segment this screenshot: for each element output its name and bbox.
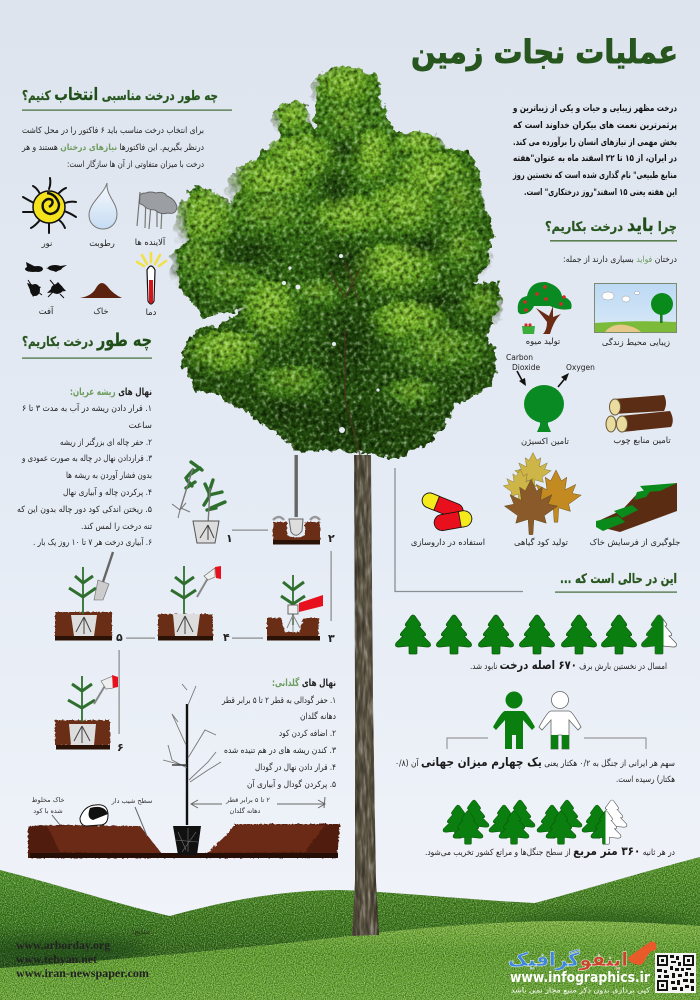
text block: potted saplings: ۲. اضافه کردن کود xyxy=(279,729,336,739)
heading: meanwhile xyxy=(555,572,677,593)
icon: medicine capsules xyxy=(420,491,473,532)
connector xyxy=(118,650,120,734)
intro text: six factors xyxy=(21,126,204,170)
text: benefits intro: درختان فواید بسیاری دارند از جمله: xyxy=(563,255,677,265)
sources: www.tebyan.net xyxy=(16,952,97,966)
icon: soil heap xyxy=(80,283,122,298)
text block: bare-root saplings: ۶. آبیاری درخت هر ۷ تا ۱۰ روز یک بار . xyxy=(33,536,152,548)
sources: منابع: xyxy=(132,927,150,936)
text block: bare-root saplings: ۳. قراردادن نهال در چاله به صورت عمودی و xyxy=(21,454,152,464)
text block: bare-root saplings: ۴. پرکردن چاله و آبیاری نهال xyxy=(63,486,152,498)
diagram: planting cross-section xyxy=(28,684,340,858)
icon: pollution cloud xyxy=(137,192,177,229)
connector xyxy=(232,530,268,531)
label: oxygen supply: تامین اکسیژن xyxy=(521,436,570,446)
step 6: watering regularly xyxy=(55,675,118,750)
text block: potted saplings: ۱. حفر گودالی به قطر ۲ تا ۵ برابر قطر xyxy=(221,695,336,706)
text block: potted saplings: ۴. قرار دادن نهال در گودال xyxy=(255,762,336,773)
labels: cross-section annotations: دهانه گلدان xyxy=(230,807,261,815)
text block: bare-root saplings: بدون فشار آوردن به ریشه ها xyxy=(66,469,152,481)
pictogram: seven trees xyxy=(395,615,677,654)
logo: infographics site: www.infographics.ir xyxy=(510,970,651,986)
label: pollutants: آلاینده ها xyxy=(135,236,166,247)
pictogram: forest groups xyxy=(443,800,627,844)
intro text: six factors: برای انتخاب درخت مناسب باید ۶ فاکتور را در محل کاشت xyxy=(22,126,204,136)
label: organic compost: تولید کود گیاهی xyxy=(514,537,569,547)
labels: cross-section annotations: شده با کود xyxy=(33,807,63,815)
label: living environment: زیبایی محیط زندگی xyxy=(602,337,670,347)
main title: عملیات نجات زمین xyxy=(411,33,678,71)
text block: bare-root saplings: ۱. قرار دادن ریشه در آب به مدت ۳ تا ۶ xyxy=(22,402,152,414)
text block: bare-root saplings: ساعت xyxy=(129,421,152,431)
text: 670 trees destroyed: امسال در نخستین بارش برف ۶۷۰ اصله درخت نابود شد. xyxy=(470,658,667,672)
label: step 5: ۵ xyxy=(116,631,123,644)
label: light: نور xyxy=(41,238,52,248)
icon: autumn leaves xyxy=(503,452,581,535)
text: per-capita forest share: هکتار) رسیده است. xyxy=(616,775,675,785)
logo: infographics site: اینفوگرافیک xyxy=(508,948,628,971)
heading: why plant trees: چرا باید درخت بکاریم؟ xyxy=(545,215,677,236)
text: 360 square metres per second: در هر ثانیه ۳۶۰ متر مربع از سطح جنگل‌ها و مراتع کشور تخریب می‌شود. xyxy=(425,844,675,858)
intro text: six factors: درخت با میزان متفاوتی از آن ها سازگار است: xyxy=(67,158,204,170)
text block: potted saplings xyxy=(221,676,336,790)
hills: grass landscape xyxy=(0,857,700,1000)
step 2: digging with spade xyxy=(273,455,320,544)
tree canopy xyxy=(170,66,504,458)
label: step 4: ۴ xyxy=(223,631,230,644)
label: pest: آفت xyxy=(39,305,54,316)
icon: sun xyxy=(23,178,76,233)
label: step 1: ۱ xyxy=(226,532,233,545)
text block: bare-root saplings xyxy=(17,387,153,548)
icon: logs xyxy=(606,395,673,432)
sources xyxy=(16,927,150,980)
icon: living environment landscape xyxy=(594,284,676,332)
tree trunk xyxy=(352,455,379,936)
text block: potted saplings: دهانه گلدان xyxy=(300,711,336,722)
label: step 3: ۳ xyxy=(328,632,335,645)
text: per-capita forest share: سهم هر ایرانی از جنگل به ۰/۲ هکتار یعنی یک چهارم میزان جهانی آن (۰/۸ xyxy=(395,755,675,770)
text block: bare-root saplings: نهال های ریشه عریان: xyxy=(70,387,152,398)
labels: cross-section annotations: ۲ تا ۵ برابر قطر xyxy=(225,796,270,804)
text block: bare-root saplings: ۲. حفر چاله ای بزرگتر از ریشه xyxy=(60,437,152,448)
icon: fruit tree xyxy=(518,282,572,334)
text block: bare-root saplings: تنه درخت را لمس کند. xyxy=(81,522,153,532)
labels: cross-section annotations: خاک مخلوط xyxy=(31,796,65,804)
icon: oxygen tree with arrows: Dioxide xyxy=(512,363,540,372)
text block: bare-root saplings: ۵. ریختن اندکی کود دور چاله بدون این که xyxy=(17,505,152,515)
logo: infographics site: کپی برداری بدون ذکر منبع مجاز نمی باشد xyxy=(511,986,651,994)
label: soil: خاک xyxy=(93,306,109,316)
intro paragraph: در ایران، از ۱۵ تا ۲۲ اسفند ماه به عنوان"هفته xyxy=(513,154,677,164)
sources: www.iran-newspaper.com xyxy=(16,966,149,980)
tree branches and sky gaps xyxy=(282,254,380,455)
icon: oxygen tree with arrows: Oxygen xyxy=(566,363,595,372)
step 3: setting seedling xyxy=(267,575,323,640)
labels: cross-section annotations xyxy=(31,796,270,815)
icon: pests xyxy=(25,262,67,298)
step 5: filling with spade xyxy=(55,552,113,640)
label: step 6: ۶ xyxy=(117,741,124,754)
connector xyxy=(330,551,332,621)
label: erosion prevention: جلوگیری از فرسایش خاک xyxy=(590,537,680,547)
icon: oxygen tree with arrows: Carbon xyxy=(506,353,533,362)
bracket line xyxy=(395,468,523,592)
icon: oxygen tree with arrows xyxy=(506,353,595,432)
text block: potted saplings: نهال های گلدانی: xyxy=(272,676,336,689)
text block: potted saplings: ۵. پرکردن گودال و آبیاری آن xyxy=(247,778,336,790)
intro paragraph: این هفته یعنی ۱۵ اسفند"روز درختکاری" است. xyxy=(524,188,677,198)
labels: cross-section annotations: سطح شیب دار xyxy=(111,797,152,805)
heading: how to plant: چه طور درخت بکاریم؟ xyxy=(22,330,152,351)
label: fruit production: تولید میوه xyxy=(526,336,561,346)
logo: infographics site xyxy=(508,942,656,994)
text block: potted saplings: ۳. کندن ریشه های در هم تنیده شده xyxy=(224,746,336,756)
connector xyxy=(126,638,155,639)
heading: how to choose a tree: چه طور درخت مناسبی انتخاب کنیم؟ xyxy=(22,85,218,105)
connector xyxy=(232,638,263,639)
text: per-capita forest share xyxy=(395,755,675,785)
label: pharmaceuticals: استفاده در داروسازی xyxy=(411,537,485,547)
intro text: six factors: درنظر بگیریم. این فاکتورها نیازهای درختان هستند و هر xyxy=(21,142,204,153)
icon: water drop xyxy=(89,183,117,229)
step 1: seedlings and pot xyxy=(172,462,225,543)
heading: how to plant xyxy=(22,330,152,359)
QR code xyxy=(655,953,696,993)
icon: erosion-protected hillside xyxy=(596,483,677,532)
label: humidity: رطوبت xyxy=(89,238,115,248)
icon: thermometer xyxy=(137,253,166,304)
sources: www.arborday.org xyxy=(16,938,110,952)
label: timber supply: تامین منابع چوب xyxy=(613,435,671,445)
pictogram: forest share per capita xyxy=(447,692,646,749)
step 4: watering xyxy=(158,566,221,640)
intro paragraph xyxy=(512,104,677,198)
label: temperature: دما xyxy=(146,307,157,317)
label: step 2: ۲ xyxy=(328,532,335,545)
